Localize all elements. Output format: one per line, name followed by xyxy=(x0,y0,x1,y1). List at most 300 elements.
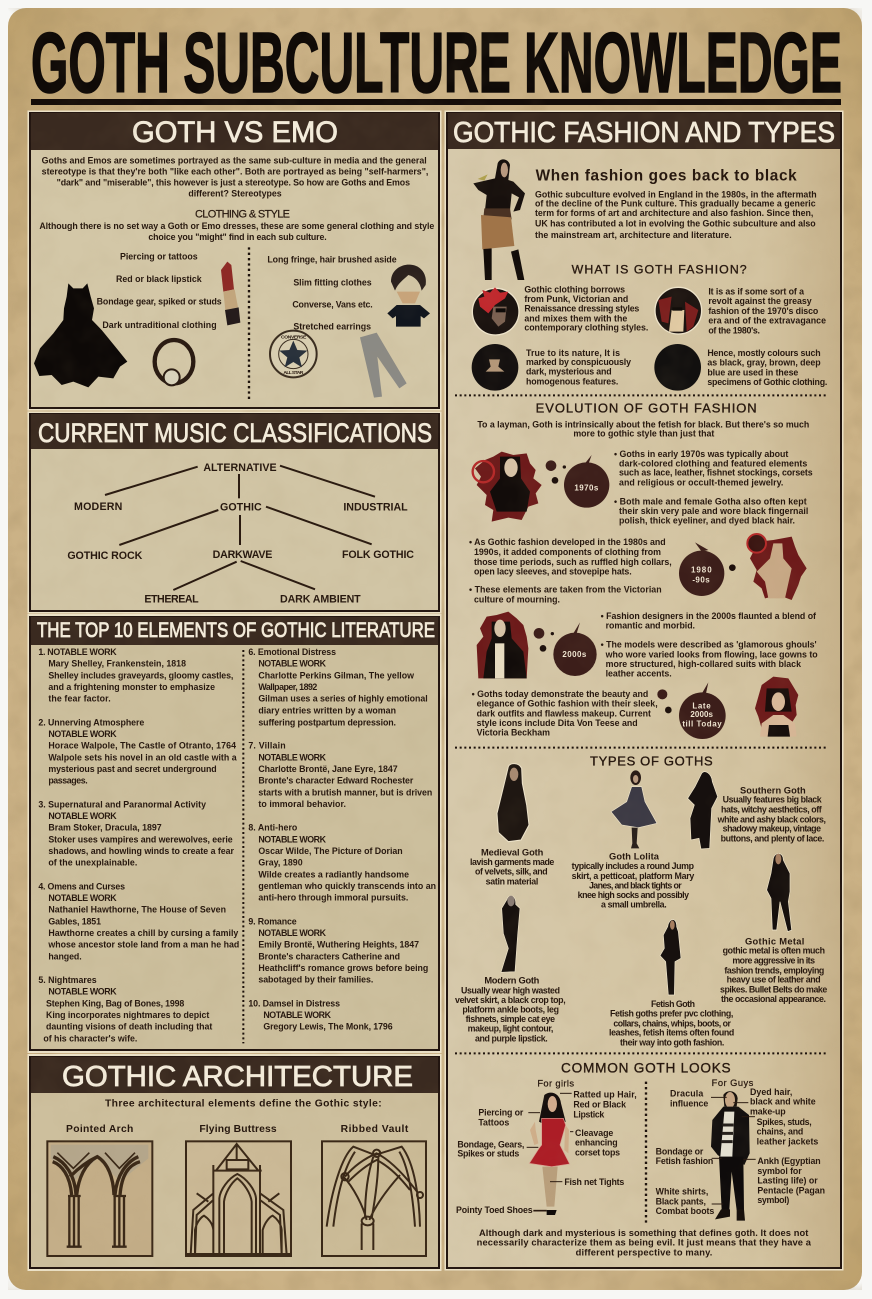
diagram: music tree: ETHEREAL xyxy=(144,593,199,605)
text: evolution intro: To a layman, Goth is intrinsically about the fetish for black. But there's so much xyxy=(477,419,809,429)
text: goth lolita: typically includes a round Jump xyxy=(572,861,695,871)
item 5: daunting visions of death including that xyxy=(46,1022,212,1032)
text: fetish goth: leashes, fetish items often found xyxy=(609,1028,734,1038)
callouts: girl look: Red or Black xyxy=(573,1100,626,1110)
item 8: 8. Anti-hero xyxy=(248,823,298,833)
panel: top 10 elements of gothic literature xyxy=(28,615,440,1052)
callouts: guy look: White shirts, xyxy=(656,1187,708,1197)
list: literature elements xyxy=(38,647,436,1043)
text: closing note xyxy=(477,1228,812,1257)
icon: punk circle xyxy=(472,287,519,335)
item 9: NOTABLE WORK xyxy=(258,928,327,938)
text: fetish goth: their way into goth fashion. xyxy=(620,1037,724,1047)
callouts: girl look: enhancing xyxy=(575,1138,618,1148)
marker: late 2000s blob xyxy=(657,682,726,739)
text: true to its nature: dark, mysterious and xyxy=(526,367,612,377)
item 8: anti-hero through immoral pursuits. xyxy=(258,893,408,903)
text: 2000s xyxy=(601,611,818,678)
callouts: girl look: Spikes or studs xyxy=(457,1149,519,1159)
panel: current music classifications xyxy=(28,412,440,612)
subheading: clothing and style: CLOTHING & STYLE xyxy=(195,208,290,220)
label: flying buttress: Flying Buttress xyxy=(199,1124,277,1135)
item 9: Heathcliff's romance grows before being xyxy=(258,963,428,973)
item 4 xyxy=(38,881,239,961)
panel: gothic architecture xyxy=(28,1055,440,1270)
text: 1970s: • Goths in early 1970s was typically about xyxy=(614,449,788,459)
text: medieval goth: Medieval Goth xyxy=(481,848,544,858)
item 8: Oscar Wilde, The Picture of Dorian xyxy=(258,846,403,856)
text block: clothing note: choice you "might" find in each sub culture. xyxy=(148,232,327,242)
text: southern goth: shadowy makeup, vintage xyxy=(723,824,821,834)
illustration: 2000s portrait xyxy=(477,612,528,678)
list: goth traits xyxy=(97,251,222,330)
text: modern goth: platform ankle boots, leg xyxy=(462,1004,559,1014)
item 6: suffering postpartum depression. xyxy=(258,717,396,727)
text: colours: specimens of Gothic clothing. xyxy=(707,377,827,387)
text: true to its nature: marked by conspicuously xyxy=(526,357,631,367)
text block: clothing note: Although there is no set way a Goth or Emo dresses, these are some general clothing and style xyxy=(39,221,434,231)
diagram: music tree: INDUSTRIAL xyxy=(343,501,408,513)
item 5 xyxy=(38,975,212,1043)
item 2: Walpole sets his novel in an old castle with a xyxy=(48,752,237,762)
list: emo traits: Stretched earrings xyxy=(293,321,371,331)
item 6: NOTABLE WORK xyxy=(258,659,327,669)
callouts: girl look xyxy=(456,1090,637,1215)
callouts: girl look: Fish net Tights xyxy=(564,1177,624,1187)
text: 1980-90s: culture of mourning. xyxy=(474,594,560,604)
section: common goth looks xyxy=(456,1060,825,1257)
item 8: Gray, 1890 xyxy=(258,858,303,868)
callouts: guy look: Bondage or xyxy=(656,1146,704,1156)
icon: converse badge xyxy=(270,331,317,377)
item 7: starts with a brutish manner, but is driven xyxy=(258,787,432,797)
text: closing note: Although dark and mysterious is something that defines goth. It does not xyxy=(479,1228,808,1238)
text: 2000s: leather accents. xyxy=(606,668,672,678)
callouts: guy look: symbol) xyxy=(757,1195,789,1205)
text: goth lolita: knee high socks and possibly xyxy=(578,890,689,900)
list: emo traits: Converse, Vans etc. xyxy=(292,299,373,309)
list: goth traits: Piercing or tattoos xyxy=(120,251,198,261)
figure: goth lolita xyxy=(611,770,657,848)
text: fetish goth: Fetish goths prefer pvc clothing, xyxy=(610,1009,733,1019)
icon: lipstick xyxy=(221,262,240,325)
item 1: the fear factor. xyxy=(48,694,111,704)
text: punk origin: and mixes them with the xyxy=(524,313,627,323)
diagram: flying buttress xyxy=(186,1141,291,1256)
heading: goth vs emo xyxy=(31,113,438,150)
text: today: • Goths today demonstrate the beauty and xyxy=(472,689,648,699)
text: modern goth: Modern Goth xyxy=(484,975,540,985)
item 4: NOTABLE WORK xyxy=(48,893,117,903)
list: emo traits: Slim fitting clothes xyxy=(293,277,372,287)
item 2: NOTABLE WORK xyxy=(48,729,117,739)
diagram: music tree xyxy=(67,462,414,606)
content: architecture xyxy=(47,1099,426,1256)
heading: literature xyxy=(31,617,438,645)
callouts: guy look: Black pants, xyxy=(656,1196,706,1206)
text: goth lolita: Goth Lolita xyxy=(609,852,660,862)
item 10: 10. Damsel in Distress xyxy=(248,998,340,1008)
callouts: guy look: Dracula xyxy=(670,1089,703,1099)
illustration: 1970s portrait xyxy=(473,452,542,522)
text: fetish goth: Fetish Goth xyxy=(651,999,695,1009)
item 2: passages. xyxy=(48,776,88,786)
text: 1970s xyxy=(614,449,813,526)
callouts: girl look: Bondage, Gears, xyxy=(457,1139,524,1149)
item 2: Horace Walpole, The Castle of Otranto, 1764 xyxy=(48,741,236,751)
text: today: dark outfits and flawless makeup. Current xyxy=(477,708,651,718)
callouts: guy look: Ankh (Egyptian xyxy=(757,1156,821,1166)
item 2: mysterious past and secret underground xyxy=(48,764,217,774)
item 6: Wallpaper, 1892 xyxy=(258,682,317,692)
text: modern goth: makeup, light contour, xyxy=(468,1024,553,1034)
illustration: 1980-90s portrait xyxy=(747,534,807,600)
icon: emo t-shirt xyxy=(387,305,430,327)
marker: 2000s blob xyxy=(534,622,597,676)
text: 2000s: • Fashion designers in the 2000s flaunted a blend of xyxy=(601,611,816,621)
text: 2000s: who wore varied looks from flowing, lace gowns to xyxy=(605,649,818,659)
marker: late 2000s blob: till Today xyxy=(682,719,722,728)
callouts: girl look: Ratted up Hair, xyxy=(573,1090,637,1100)
item 4: 4. Omens and Curses xyxy=(38,881,125,891)
text: colours: as black, gray, brown, deep xyxy=(707,358,821,368)
callouts: guy look: make-up xyxy=(750,1107,786,1117)
marker: 1980-90s blob: 1980 xyxy=(691,565,712,574)
item 2: 2. Unnerving Atmosphere xyxy=(38,717,144,727)
item 3: Stoker uses vampires and werewolves, eerie xyxy=(48,834,233,844)
callouts: guy look: black and white xyxy=(750,1097,816,1107)
item 9: sabotaged by their families. xyxy=(258,975,373,985)
item 3: Bram Stoker, Dracula, 1897 xyxy=(48,823,162,833)
heading: what is goth fashion: WHAT IS GOTH FASHION? xyxy=(572,262,747,276)
text: 2000s: more structured, high-collared suits with black xyxy=(606,659,801,669)
item 5: Stephen King, Bag of Bones, 1998 xyxy=(46,998,184,1008)
illustration: late 2000s portrait xyxy=(755,677,798,737)
callouts: girl look: Tattoos xyxy=(478,1117,509,1127)
text: colours: blue are used in these xyxy=(707,367,798,377)
callouts: guy look: leather jackets xyxy=(757,1136,818,1146)
callouts: guy look: Dyed hair, xyxy=(750,1087,792,1097)
item 8: Wilde creates a radiantly handsome xyxy=(258,869,409,879)
text: closing note: different perspective to many. xyxy=(576,1247,712,1257)
diagram: pointed arch xyxy=(47,1141,152,1256)
text: 1980-90s: • As Gothic fashion developed in the 1980s and xyxy=(469,537,666,547)
item 7: Charlotte Brontë, Jane Eyre, 1847 xyxy=(258,764,398,774)
panel: goth vs emo xyxy=(28,112,440,410)
heading: evolution: EVOLUTION OF GOTH FASHION xyxy=(536,400,757,415)
figure: modern goth xyxy=(501,896,520,972)
text: punk origin: contemporary clothing styles. xyxy=(524,323,648,333)
label: for girls: For girls xyxy=(537,1079,574,1089)
text: southern goth: buttons, and plenty of lace. xyxy=(721,834,824,844)
text: southern goth xyxy=(717,785,826,844)
text: fetish goth: collars, chains, whips, boots, or xyxy=(613,1018,732,1028)
figure: southern goth xyxy=(688,772,718,849)
icon: black dress xyxy=(34,283,127,387)
text: gothic metal xyxy=(720,936,827,1004)
text: medieval goth: satin material xyxy=(486,876,538,886)
diagram: music tree: DARK AMBIENT xyxy=(280,594,361,606)
text: 1970s: dark-colored clothing and featured elements xyxy=(619,458,807,468)
panel: gothic fashion and types xyxy=(446,112,842,1270)
text: colours: Hence, mostly colours such xyxy=(707,348,821,358)
item 3 xyxy=(38,799,235,868)
text: revolt: of the 1980's. xyxy=(708,325,760,335)
label: for guys: For Guys xyxy=(712,1078,754,1088)
item 2 xyxy=(38,717,237,786)
item 1: 1. NOTABLE WORK xyxy=(38,647,117,657)
item 5: NOTABLE WORK xyxy=(48,987,117,997)
diagram: music tree: GOTHIC ROCK xyxy=(67,550,143,562)
text: gothic metal: heavy use of leather and xyxy=(727,975,821,985)
item 9: Emily Brontë, Wuthering Heights, 1847 xyxy=(258,940,419,950)
heading: common goth looks: COMMON GOTH LOOKS xyxy=(561,1060,731,1075)
heading: architecture: GOTHIC ARCHITECTURE xyxy=(62,1061,413,1093)
text: medieval goth: of velvets, silk, and xyxy=(475,867,548,877)
diagram: music tree: GOTHIC xyxy=(220,501,262,513)
item 9: Bronte's characters Catherine and xyxy=(258,951,400,961)
text: southern goth: hats, witchy aesthetics, off xyxy=(721,804,822,814)
text block: history: term for forms of art and architecture and also fashion. Since then, xyxy=(535,208,813,218)
callouts: girl look: corset tops xyxy=(575,1147,620,1157)
heading: fashion: GOTHIC FASHION AND TYPES xyxy=(453,117,835,149)
text: gothic metal: spikes. Bullet Belts do make xyxy=(720,984,827,994)
item 6: Gilman uses a series of highly emotional xyxy=(258,694,428,704)
text block: history xyxy=(535,189,817,240)
figure: fetish goth xyxy=(660,920,681,995)
item 4: whose ancestor stole land from a man he had xyxy=(47,940,239,950)
diagram: music tree: MODERN xyxy=(74,501,122,513)
figure: goth girl xyxy=(529,1093,570,1215)
text: 1970s: their skin very pale and wore black fingernail xyxy=(619,506,808,516)
icon: grey skinny jeans xyxy=(360,333,407,398)
item 9: 9. Romance xyxy=(248,916,297,926)
text block: history: of the decline of the Punk culture. This gradually became a generic xyxy=(535,199,816,209)
callouts: guy look: symbol for xyxy=(757,1166,802,1176)
item 8: gentleman who quickly transcends into an xyxy=(258,881,436,891)
text: today: Victoria Beckham xyxy=(477,728,550,738)
text: true to its nature: True to its nature, It is xyxy=(526,348,620,358)
item 7: 7. Villain xyxy=(248,741,286,751)
figure: goth guy xyxy=(711,1091,750,1221)
callouts: guy look: chains, and xyxy=(757,1127,803,1137)
text: southern goth: Southern Goth xyxy=(740,785,806,795)
section: what is goth fashion xyxy=(455,159,828,395)
diagram: music tree: DARKWAVE xyxy=(213,549,272,561)
callouts: guy look: Spikes, studs, xyxy=(757,1117,812,1127)
text: 2000s: romantic and morbid. xyxy=(606,620,695,630)
text: colours xyxy=(707,348,827,387)
text: revolt: revolt against the greasy xyxy=(708,296,812,306)
text: evolution intro xyxy=(477,419,809,439)
section: types of goths xyxy=(455,754,828,1053)
item 7: to immoral behavior. xyxy=(258,799,346,809)
item 6: 6. Emotional Distress xyxy=(248,647,336,657)
text: 1970s: and religious or occult-themed jewelry. xyxy=(619,478,783,488)
callouts: guy look xyxy=(656,1087,825,1216)
heading: types of goths: TYPES OF GOTHS xyxy=(590,754,713,769)
text: goth lolita xyxy=(572,852,695,910)
callouts: guy look: influence xyxy=(670,1098,708,1108)
callouts: girl look: Lipstick xyxy=(573,1109,604,1119)
icon: dark bust circle xyxy=(472,344,518,391)
text: punk origin: Renaissance dressing styles xyxy=(524,304,639,314)
text: today: style icons include Dita Von Teese and xyxy=(477,718,638,728)
text: revolt: era and of the extravagance xyxy=(708,316,826,326)
label: ribbed vault: Ribbed Vault xyxy=(341,1124,409,1135)
text: true to its nature: homogenous features. xyxy=(526,377,618,387)
item 1: and a frightening monster to emphasize xyxy=(48,682,215,692)
heading: literature: THE TOP 10 ELEMENTS OF GOTHIC LITERATURE xyxy=(37,619,435,642)
icon: emo head xyxy=(391,265,426,303)
content: goth vs emo xyxy=(34,155,434,400)
text: modern goth: and purple lipstick. xyxy=(475,1033,548,1043)
item 4: Gables, 1851 xyxy=(48,916,101,926)
text block: history: Gothic subculture evolved in England in the 1980s, in the aftermath xyxy=(535,189,817,199)
icon: black circle xyxy=(654,344,701,391)
text: 2000s: • The models were described as 'glamorous ghouls' xyxy=(601,640,817,650)
callouts: girl look: Piercing or xyxy=(478,1108,524,1118)
text: 1970s: polish, thick eyeliner, and dyed black hair. xyxy=(619,516,795,526)
text: fetish goth xyxy=(609,999,734,1047)
text block: intro: Goths and Emos are sometimes portrayed as the same sub-culture in media and the general xyxy=(42,155,427,165)
item 7: NOTABLE WORK xyxy=(258,752,327,762)
text: revolt: It is as if some sort of a xyxy=(708,286,804,296)
text: punk origin: Gothic clothing borrows xyxy=(524,285,625,295)
item 3: of the unexplainable. xyxy=(48,858,137,868)
callouts: guy look: Pentacle (Pagan xyxy=(757,1185,825,1195)
text: 1980-90s: 1990s, it added components of clothing from xyxy=(474,547,661,557)
text: modern goth xyxy=(455,975,566,1043)
text: evolution intro: more to gothic style than just that xyxy=(573,429,714,439)
list: emo traits: Long fringe, hair brushed aside xyxy=(267,255,397,265)
text: 1970s: such as lace, leather, fishnet stockings, corsets xyxy=(619,468,813,478)
heading: when fashion goes back to black: When fashion goes back to black xyxy=(536,168,797,185)
callouts: girl look: Cleavage xyxy=(575,1128,613,1138)
icon: revolt circle xyxy=(655,287,702,334)
text: punk origin: from Punk, Victorian and xyxy=(524,294,628,304)
text: medieval goth: lavish garments made xyxy=(470,857,554,867)
figure: gothic metal xyxy=(767,854,792,932)
list: goth traits: Dark untraditional clothing xyxy=(102,320,217,330)
illustration: goth woman xyxy=(473,159,525,280)
list: goth traits: Bondage gear, spiked or studs xyxy=(97,297,222,307)
item 4: hanged. xyxy=(48,951,82,961)
icon: converse badge: CONVERSE xyxy=(281,335,307,341)
callouts: guy look: Fetish fashion xyxy=(656,1156,713,1166)
heading: goth vs emo: GOTH VS EMO xyxy=(132,116,338,149)
text: revolt: fashion of the 1970's disco xyxy=(708,306,819,316)
item 10: Gregory Lewis, The Monk, 1796 xyxy=(263,1022,393,1032)
item 6: Charlotte Perkins Gilman, The yellow xyxy=(258,670,414,680)
text block: history: the mainstream art, architecture and literature. xyxy=(535,230,732,240)
text: goth lolita: skirt, a petticoat, platform Mary xyxy=(572,871,694,881)
item 3: 3. Supernatural and Paranormal Activity xyxy=(38,799,206,809)
marker: late 2000s blob: 2000s xyxy=(690,710,714,719)
text: today xyxy=(472,689,658,738)
text: modern goth: fishnets, simple cat eye xyxy=(466,1014,555,1024)
callouts: guy look: Lasting life) or xyxy=(757,1176,818,1186)
callouts: girl look: Pointy Toed Shoes xyxy=(456,1205,533,1215)
text block: intro: stereotype is that they're both "like each other". Both are portrayed as being "self-harmers", xyxy=(42,167,428,177)
diagram: ribbed vault xyxy=(322,1141,426,1256)
text: gothic metal: the occasional appearance. xyxy=(721,994,826,1004)
text: goth lolita: a small umbrella. xyxy=(601,900,667,910)
item 6 xyxy=(248,647,428,727)
item 5: King incorporates nightmares to depict xyxy=(46,1010,209,1020)
item 8: NOTABLE WORK xyxy=(258,834,327,844)
text: medieval goth xyxy=(470,848,554,886)
item 9 xyxy=(248,916,428,985)
item 4: Nathaniel Hawthorne, The House of Seven xyxy=(48,905,226,915)
section: evolution of goth fashion xyxy=(455,400,828,748)
label: pointed arch: Pointed Arch xyxy=(66,1124,133,1135)
heading: music: CURRENT MUSIC CLASSIFICATIONS xyxy=(38,418,432,448)
text: modern goth: velvet skirt, a black crop top, xyxy=(455,995,566,1005)
text: punk origin xyxy=(524,285,648,333)
text: gothic metal: Gothic Metal xyxy=(745,936,804,946)
list: emo traits xyxy=(267,255,397,331)
item 1: Mary Shelley, Frankenstein, 1818 xyxy=(48,659,186,669)
text: 1980-90s: open lacy sleeves, and stovepipe hats. xyxy=(474,566,632,576)
text: closing note: necessarily characterize them as being evil. It just means that they have a xyxy=(477,1238,812,1248)
diagram: music tree: ALTERNATIVE xyxy=(203,462,277,474)
text block: intro: "dark" and "miserable", this however is just a stereotype. So how are Goths and Emos xyxy=(57,177,410,187)
item 3: NOTABLE WORK xyxy=(48,811,117,821)
text: 1970s: • Both male and female Gotha also often kept xyxy=(614,496,807,506)
item 4: Hawthorne creates a chill by cursing a family xyxy=(48,928,238,938)
item 10: NOTABLE WORK xyxy=(263,1010,332,1020)
marker: 1970s blob xyxy=(546,455,609,508)
icon: converse badge: ALL STAR xyxy=(283,370,304,376)
item 7 xyxy=(248,741,432,809)
diagram: music tree: FOLK GOTHIC xyxy=(342,549,414,561)
text: true to its nature xyxy=(526,348,631,387)
text: gothic metal: more aggressive in its xyxy=(732,955,815,965)
callouts: guy look: Combat boots xyxy=(656,1206,714,1216)
item 3: shadows, and howling winds to create a fear xyxy=(48,846,235,856)
text: 1980-90s: • These elements are taken from the Victorian xyxy=(469,585,662,595)
text block: intro xyxy=(42,155,428,199)
text: gothic metal: gothic metal is often much xyxy=(723,946,825,956)
item 6: diary entries written by a woman xyxy=(258,705,396,715)
text block: clothing note xyxy=(39,221,434,242)
text: goth lolita: Janes, and black tights or xyxy=(589,880,682,890)
text: gothic metal: fashion trends, employing xyxy=(724,965,824,975)
marker: 1980-90s blob: -90s xyxy=(692,575,710,584)
item 1 xyxy=(38,647,233,704)
list: goth traits: Red or black lipstick xyxy=(116,274,202,284)
figure: medieval goth xyxy=(497,764,529,842)
icon: piercing ring xyxy=(155,340,193,385)
text: southern goth: Usually features big black xyxy=(723,794,822,804)
text: 1980-90s xyxy=(469,537,672,604)
marker: 1970s blob: 1970s xyxy=(574,483,599,492)
marker: 2000s blob: 2000s xyxy=(562,650,587,659)
item 8 xyxy=(248,823,436,903)
item 5: of his character's wife. xyxy=(43,1033,137,1043)
item 1: Shelley includes graveyards, gloomy castles, xyxy=(48,670,233,680)
text: southern goth: white and ashy black colors, xyxy=(717,814,826,824)
text: 1980-90s: those time periods, such as ruffled high collars, xyxy=(474,557,672,567)
text block: intro: different? Stereotypes xyxy=(188,189,282,199)
marker: 1980-90s blob xyxy=(679,542,736,596)
text: revolt xyxy=(708,286,826,335)
text: architecture intro: Three architectural elements define the Gothic style: xyxy=(105,1099,382,1110)
item 7: Bronte's character Edward Rochester xyxy=(258,776,414,786)
item 5: 5. Nightmares xyxy=(38,975,97,985)
text block: history: UK has contributed a lot in evolving the Gothic subculture and also xyxy=(535,219,816,229)
